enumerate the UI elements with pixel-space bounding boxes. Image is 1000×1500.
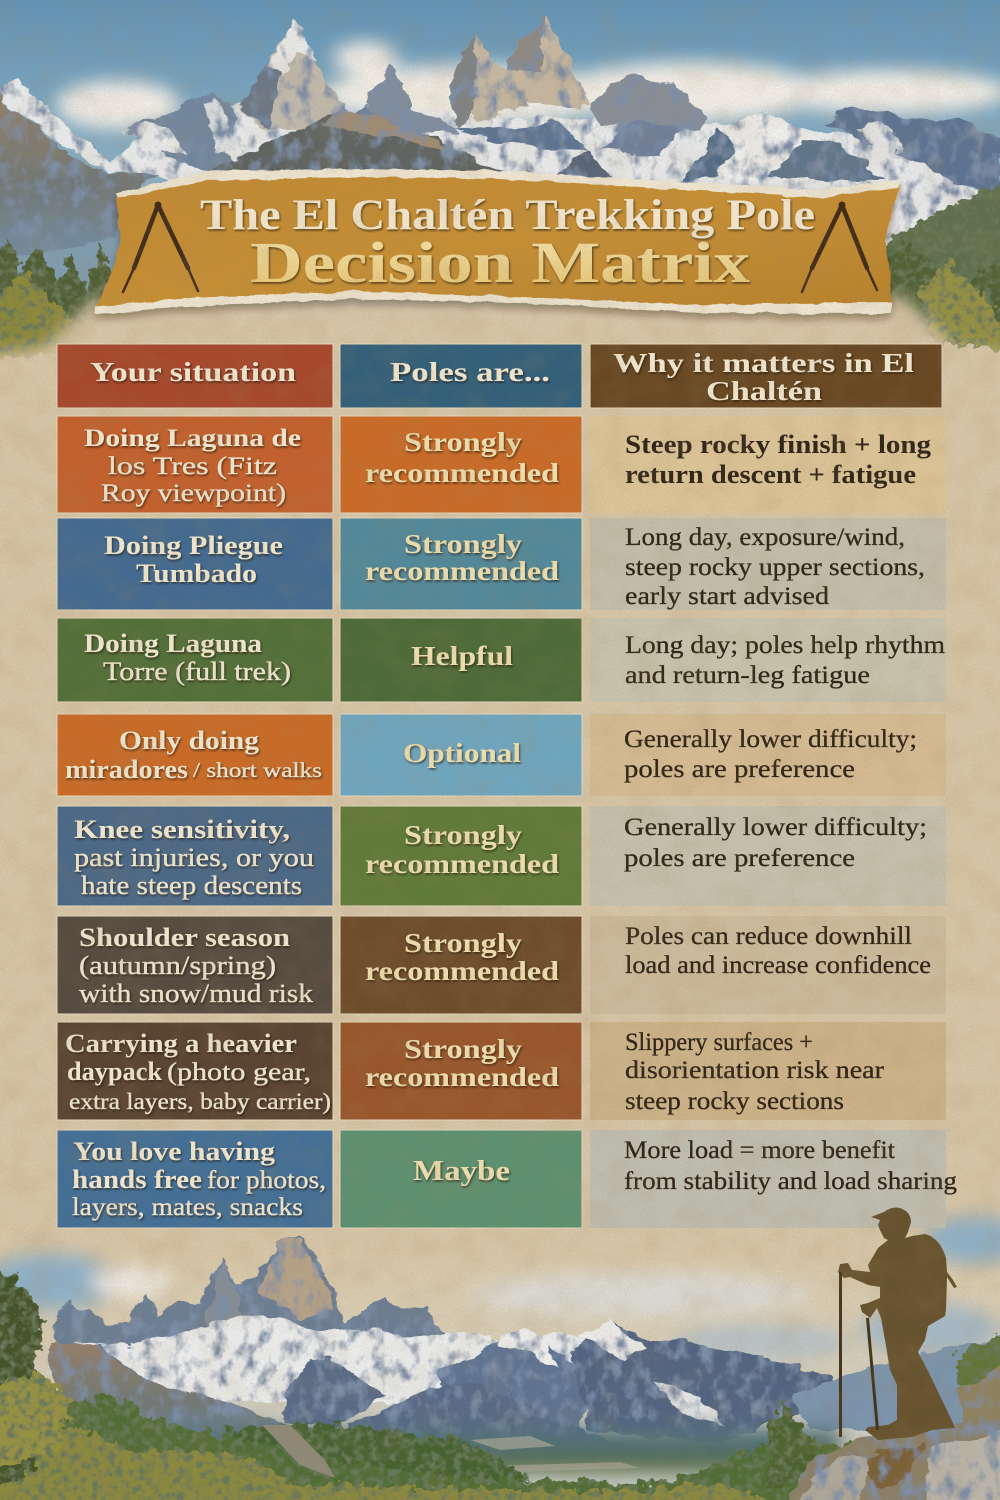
header: your situation (57, 344, 333, 408)
situation cell (57, 1130, 333, 1228)
reason cell: return descent + fatigue (625, 460, 916, 489)
reason cell: poles are preference (624, 845, 855, 872)
verdict cell: Strongly (404, 427, 523, 457)
verdict cell: Strongly (404, 928, 523, 958)
reason cell: steep rocky upper sections, (625, 554, 925, 581)
illustration: top mountain scene (0, 0, 1000, 340)
situation cell: (autumn/spring) (79, 951, 276, 980)
background: parchment panel blend (0, 298, 1000, 1260)
situation cell: You love having (73, 1137, 275, 1166)
reason cell: More load = more benefit (624, 1137, 895, 1164)
icon: right trekking poles (802, 202, 877, 292)
reason cell: Generally lower difficulty; (624, 726, 917, 753)
reason cell: Poles can reduce downhill (625, 923, 912, 950)
situation cell (57, 916, 333, 1014)
situation cell (57, 416, 333, 513)
icon: hiker silhouette with poles (838, 1208, 957, 1440)
reason cell (590, 714, 946, 796)
reason cell (590, 518, 946, 610)
banner ribbon (95, 169, 900, 314)
reason cell: disorientation risk near (625, 1057, 885, 1084)
row: Laguna Torre (57, 618, 946, 702)
illustration: bottom mountain scene (0, 1216, 1000, 1500)
situation cell: Tumbado (136, 559, 257, 588)
header: why it matters (590, 344, 942, 408)
verdict cell (340, 518, 582, 610)
row: knee sensitivity (57, 806, 946, 906)
verdict cell: recommended (365, 1062, 559, 1092)
situation cell: hate steep descents (81, 871, 302, 900)
situation cell: Roy viewpoint) (101, 480, 286, 507)
reason cell: steep rocky sections (625, 1088, 844, 1115)
reason cell: Long day, exposure/wind, (625, 524, 905, 551)
situation cell: layers, mates, snacks (72, 1194, 303, 1221)
row: Pliegue Tumbado (57, 518, 946, 610)
verdict cell (340, 618, 582, 702)
reason cell (590, 806, 946, 906)
situation cell: / short walks (193, 758, 322, 782)
reason cell: Generally lower difficulty; (624, 814, 927, 841)
situation cell: (photo gear, (167, 1059, 311, 1086)
reason cell: Steep rocky finish + long (625, 430, 931, 459)
header: why it matters: Chaltén (706, 376, 822, 406)
verdict cell: recommended (365, 458, 559, 488)
reason cell: and return-leg fatigue (625, 662, 870, 689)
reason cell (590, 618, 946, 702)
situation cell: miradores (65, 755, 188, 784)
reason cell (590, 1022, 946, 1120)
illustration: rocky outcrop (780, 1358, 1000, 1500)
verdict cell: Helpful (411, 641, 514, 671)
verdict cell (340, 416, 582, 513)
reason cell: Slippery surfaces + (625, 1029, 813, 1056)
verdict cell (340, 1130, 582, 1228)
icon: left trekking poles (123, 202, 198, 292)
illustration: trees beside banner (0, 180, 1000, 360)
verdict cell: Maybe (413, 1156, 510, 1187)
situation cell: hands free (72, 1165, 202, 1194)
header: your situation: Your situation (90, 357, 296, 387)
situation cell: Doing Laguna de (84, 425, 301, 452)
situation cell: Knee sensitivity, (74, 815, 290, 844)
situation cell: Carrying a heavier (65, 1029, 297, 1058)
situation cell: Shoulder season (79, 923, 291, 952)
reason cell: poles are preference (624, 756, 855, 783)
situation cell (57, 714, 333, 796)
header: poles are: Poles are... (390, 357, 550, 387)
reason cell: Long day; poles help rhythm (625, 632, 946, 659)
title banner (95, 169, 900, 314)
situation cell: past injuries, or you (74, 843, 314, 872)
situation cell: los Tres (Fitz (108, 453, 277, 480)
reason cell (590, 1130, 958, 1228)
row: Laguna de los Tres (57, 416, 946, 513)
situation cell: Torre (full trek) (103, 657, 291, 686)
situation cell (57, 518, 333, 610)
verdict cell (340, 916, 582, 1014)
reason cell: load and increase confidence (625, 952, 931, 979)
verdict cell: recommended (365, 849, 559, 879)
reason cell: from stability and load sharing (624, 1168, 958, 1195)
header: poles are (340, 344, 582, 408)
verdict cell: Strongly (404, 1034, 523, 1064)
verdict cell: Strongly (404, 820, 523, 850)
heading: first line: The El Chaltén Trekking Pole (200, 192, 815, 239)
row: heavier daypack (57, 1022, 946, 1120)
situation cell: Doing Pliegue (104, 531, 283, 560)
verdict cell (340, 806, 582, 906)
verdict cell: Strongly (404, 529, 523, 559)
reason cell (590, 416, 946, 513)
situation cell: extra layers, baby carrier) (69, 1089, 331, 1114)
situation cell: Only doing (119, 726, 259, 755)
verdict cell: Optional (403, 738, 522, 768)
situation cell: daypack (67, 1057, 163, 1086)
verdict cell: recommended (365, 556, 559, 586)
reason cell: early start advised (625, 583, 830, 610)
decision matrix table (57, 344, 958, 1228)
situation cell (57, 806, 333, 906)
row: shoulder season (57, 916, 946, 1014)
heading: Decision Matrix: Decision Matrix (250, 230, 750, 295)
situation cell (57, 618, 333, 702)
row: hands free (57, 1130, 958, 1228)
verdict cell (340, 1022, 582, 1120)
header row (57, 344, 942, 408)
verdict cell (340, 714, 582, 796)
header: why it matters: Why it matters in El (613, 348, 915, 378)
situation cell: for photos, (207, 1167, 326, 1194)
verdict cell: recommended (365, 956, 559, 986)
reason cell (590, 916, 946, 1014)
situation cell (57, 1022, 333, 1120)
situation cell: Doing Laguna (84, 629, 262, 658)
situation cell: with snow/mud risk (79, 979, 313, 1008)
row: miradores (57, 714, 946, 796)
